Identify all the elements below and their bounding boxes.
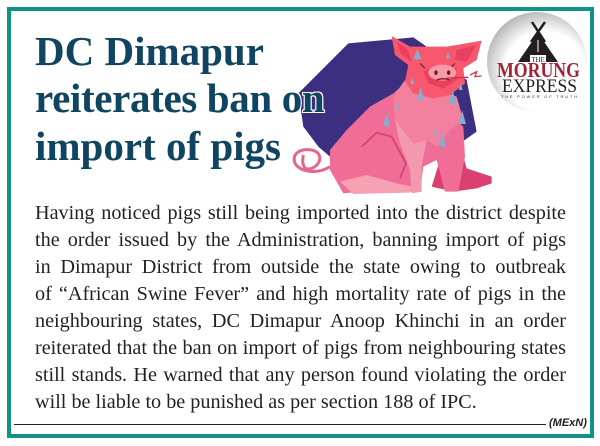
body text: neighbouring states, DC Dimapur Anoop Khinchi in an order (35, 310, 566, 332)
logo: The Morung Express: THE POWER OF TRUTH (501, 94, 577, 99)
body text: reiterated that the ban on import of pigs from neighbouring states (35, 336, 566, 358)
credit rule (14, 424, 546, 426)
body text: the order issued by the Administration, banning import of pigs (35, 228, 566, 250)
title: import of pigs (35, 122, 281, 168)
body text: of “African Swine Fever” and high mortality rate of pigs in the (35, 282, 566, 304)
body text: Having noticed pigs still being imported into the district despite (35, 202, 566, 224)
logo: The Morung Express: MORUNG (497, 58, 580, 82)
logo: The Morung Express: EXPRESS (502, 76, 577, 97)
title: DC Dimapur (35, 28, 264, 74)
logo: The Morung Express: THE (531, 56, 545, 64)
credit: (MExN) (549, 417, 587, 429)
body text (35, 202, 566, 412)
body text: will be liable to be punished as per section 188 of IPC. (35, 390, 477, 412)
body text: still stands. He warned that any person found violating the order (35, 364, 566, 386)
body text: in Dimapur District from outside the state owing to outbreak (35, 256, 566, 278)
title: reiterates ban on (35, 75, 324, 121)
title (35, 28, 326, 169)
